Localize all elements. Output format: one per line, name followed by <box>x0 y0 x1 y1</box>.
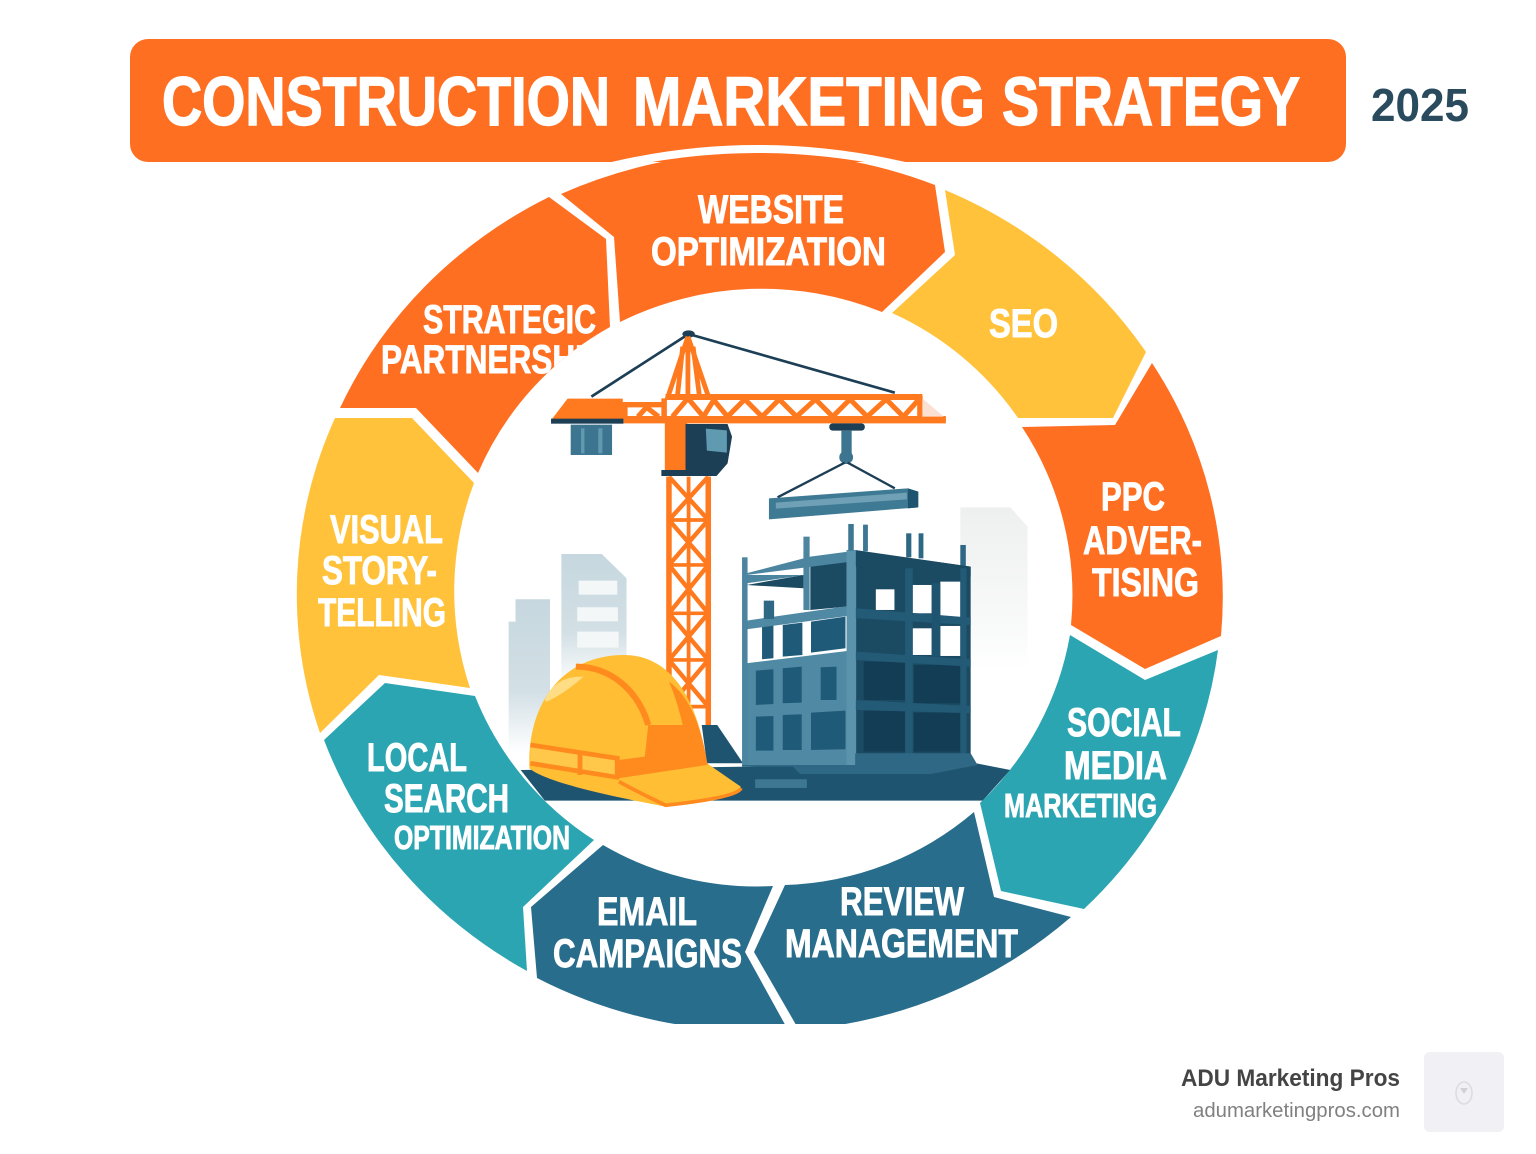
illustration: construction scene <box>509 330 1028 807</box>
title banner: STRATEGY <box>1002 63 1300 140</box>
footer brand name: ADU Marketing Pros <box>1181 1065 1400 1092</box>
hard hat <box>529 655 741 807</box>
segment: website optimization <box>561 149 945 322</box>
mast base <box>702 725 743 763</box>
title banner: MARKETING <box>633 63 985 140</box>
segment: website optimization: OPTIMIZATION <box>651 230 886 274</box>
crane mast <box>669 477 708 725</box>
segment: local search optimization: SEARCH <box>384 777 509 821</box>
segment: ppc advertising: ADVER- <box>1083 519 1202 563</box>
segment: visual storytelling: VISUAL <box>330 508 443 552</box>
segment: review management: MANAGEMENT <box>785 922 1018 966</box>
segment: email campaigns: EMAIL <box>597 890 697 934</box>
segment: local search optimization <box>324 683 594 971</box>
segment: review management: REVIEW <box>840 880 965 924</box>
segment: review management <box>754 812 1071 1030</box>
segmented ring <box>297 149 1223 1031</box>
crane cab <box>661 423 732 476</box>
segment: local search optimization: OPTIMIZATION <box>394 819 570 856</box>
segment: strategic partnerships: PARTNERSHIPS <box>381 338 626 382</box>
segment: visual storytelling: TELLING <box>318 591 446 635</box>
segment: seo: SEO <box>989 302 1058 346</box>
segment: ppc advertising: PPC <box>1101 475 1165 519</box>
segment: social media marketing: MEDIA <box>1064 744 1167 788</box>
year label: 2025 <box>1371 79 1469 131</box>
counterweight <box>551 399 623 455</box>
segment: seo <box>892 190 1146 418</box>
segment: social media marketing <box>980 635 1218 909</box>
segment: social media marketing: MARKETING <box>1004 787 1157 824</box>
segment: strategic partnerships <box>340 197 626 473</box>
crane jib <box>623 337 946 423</box>
segment: ppc advertising: TISING <box>1092 561 1199 605</box>
segment: visual storytelling <box>297 418 474 733</box>
segment: social media marketing: SOCIAL <box>1067 701 1181 745</box>
footer url: adumarketingpros.com <box>1193 1099 1400 1122</box>
segment: email campaigns <box>531 845 788 1031</box>
segment: visual storytelling: STORY- <box>322 549 437 593</box>
title banner <box>130 39 1346 162</box>
ground <box>521 763 1010 801</box>
hook and sling <box>778 423 895 497</box>
title banner: CONSTRUCTION <box>162 63 610 140</box>
crane cables <box>591 334 895 397</box>
segment: local search optimization: LOCAL <box>367 736 467 780</box>
segment: email campaigns: CAMPAIGNS <box>553 932 742 976</box>
segment: website optimization: WEBSITE <box>698 188 844 232</box>
building <box>742 524 978 788</box>
steel beam <box>769 488 918 519</box>
segment: ppc advertising <box>1022 363 1223 669</box>
segment: strategic partnerships: STRATEGIC <box>423 298 596 342</box>
logo placeholder <box>1424 1052 1504 1132</box>
background skyline <box>509 507 1028 753</box>
